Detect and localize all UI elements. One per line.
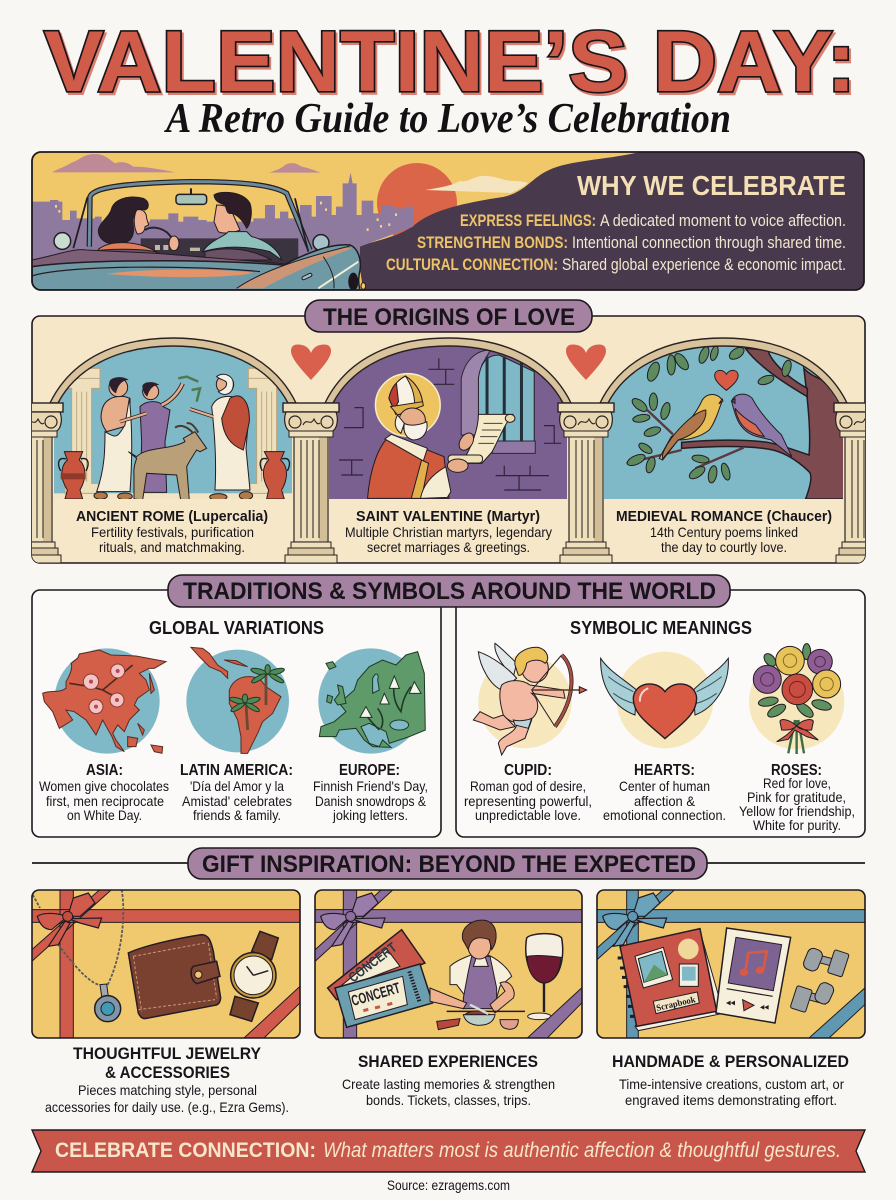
origin text: medieval romance: 14th Century poems linked [650,524,798,540]
arch: medieval romance scene [600,335,850,505]
card text: Pieces matching style, personal [78,1082,257,1098]
text: roses: Pink for gratitude, [747,789,846,805]
card text: Time-intensive creations, custom art, or [619,1076,844,1092]
text: asia: on White Day. [67,807,142,823]
text: europe: Finnish Friend's Day, [313,778,428,794]
card text: HANDMADE & PERSONALIZED [612,1052,849,1071]
card: jewelry and accessories [30,888,300,1115]
icon: heart left [291,345,331,380]
icon: heart right [566,345,606,380]
text: latin america [180,762,293,823]
card frame [315,890,582,1038]
reason: cultural connection: Shared global experience & economic impact. [562,256,846,274]
icon: cupid [473,643,587,755]
text: hearts [603,762,726,823]
card text: accessories for daily use. (e.g., Ezra Gems). [45,1099,289,1115]
map: europe with snowdrops [318,648,425,754]
reason: express feelings: A dedicated moment to voice affection. [600,212,846,230]
card: handmade and personalized [593,888,867,1108]
subtitle: A Retro Guide to Love’s Celebration [163,96,731,142]
card text [612,1052,849,1108]
panel: symbolic meanings [456,590,865,837]
text: cupid: unpredictable love. [475,807,581,823]
origin text: saint valentine: secret marriages & greetings. [367,539,530,555]
banner: celebrate connection [32,1130,865,1172]
text: roses: Yellow for friendship, [739,803,855,819]
illustration: tickets chef wine [313,888,597,1040]
banner: celebrate connection: CELEBRATE CONNECTION: [55,1139,316,1162]
card frame [32,890,300,1038]
text: europe: Danish snowdrops & [315,793,427,809]
text: cupid: CUPID: [504,762,552,779]
text: roses [739,762,855,833]
card: shared experiences [313,888,597,1108]
banner: celebrate connection: What matters most is authentic affection & thoughtful gestures. [323,1139,841,1162]
card text: & ACCESSORIES [105,1063,230,1082]
text: hearts: Center of human [619,778,710,794]
origin text: ancient rome: rituals, and matchmaking. [99,539,245,555]
card text [45,1044,289,1115]
scrapbook label: Scrapbook [655,994,696,1013]
text: hearts: affection & [634,793,696,809]
text: latin america: 'Día del Amor y la [190,778,284,794]
origin text: medieval romance: MEDIEVAL ROMANCE (Chaucer) [616,509,832,525]
origin text: medieval romance [616,509,832,555]
heading pill: the origins of love: THE ORIGINS OF LOVE [323,304,575,331]
card text: THOUGHTFUL JEWELRY [73,1044,262,1063]
text: roses: White for purity. [753,817,841,833]
text: hearts: HEARTS: [634,762,695,779]
origin text: ancient rome: Fertility festivals, purification [91,524,254,540]
subheading: global variations: GLOBAL VARIATIONS [149,618,324,638]
illustration: scrapbook player cufflinks [593,888,867,1040]
text: asia: first, men reciprocate [46,793,164,809]
origin text: saint valentine: Multiple Christian martyrs, legendary [345,524,552,540]
text: europe: EUROPE: [339,762,400,779]
reason: cultural connection [386,256,846,274]
origin text: ancient rome: ANCIENT ROME (Lupercalia) [76,509,268,525]
illustration: necklace wallet watch [30,888,300,1040]
columns [7,403,890,563]
red ticket label: CONCERT [345,939,400,985]
panel: global variations [32,590,441,837]
hero heading: WHY WE CELEBRATE [577,170,846,201]
reason: strengthen bonds: STRENGTHEN BONDS: [417,234,568,252]
text: asia [39,762,169,823]
icon: rose bouquet [749,644,844,754]
text: europe [313,762,428,823]
title: VALENTINE’S DAY: [46,16,858,112]
text: latin america: Amistad' celebrates [182,793,292,809]
panel: why we celebrate [32,152,864,291]
map: asia with blossoms [43,648,166,754]
text: europe: joking letters. [332,807,408,823]
reason: strengthen bonds: Intentional connection through shared time. [572,234,846,252]
text: latin america: LATIN AMERICA: [180,762,293,779]
text: cupid: representing powerful, [464,793,592,809]
reason: express feelings: EXPRESS FEELINGS: [460,212,596,230]
blue ticket label: CONCERT [349,980,402,1010]
hero frame [32,152,864,290]
text: asia: Women give chocolates [39,778,169,794]
reason: cultural connection: CULTURAL CONNECTION: [386,256,558,274]
text: asia: ASIA: [86,762,123,779]
text: cupid [464,762,592,823]
card frame [597,890,865,1038]
text: roses: ROSES: [771,762,822,779]
reason: strengthen bonds [417,234,846,252]
text: hearts: emotional connection. [603,807,726,823]
card text [342,1052,555,1108]
origin text: ancient rome [76,509,268,555]
card text: SHARED EXPERIENCES [358,1052,538,1071]
text: roses: Red for love, [763,775,831,791]
icon: winged heart [601,652,728,748]
origin text: medieval romance: the day to courtly love. [661,539,787,555]
card text: Create lasting memories & strengthen [342,1076,555,1092]
heading pill: gift inspiration: GIFT INSPIRATION: BEYOND THE EXPECTED [202,851,696,878]
text: latin america: friends & family. [193,807,281,823]
reason: express feelings [460,212,846,230]
origin text: saint valentine [345,509,552,555]
hero illustration: couple in convertible at sunset [32,152,864,291]
origin text: saint valentine: SAINT VALENTINE (Martyr) [356,509,540,525]
arch: saint valentine scene [325,335,575,505]
map: latin america with palms [186,647,289,753]
text: cupid: Roman god of desire, [470,778,586,794]
subheading: symbolic meanings: SYMBOLIC MEANINGS [570,618,752,638]
card text: engraved items demonstrating effort. [625,1092,837,1108]
arch: ancient rome scene [50,337,296,499]
heading pill: traditions and symbols: TRADITIONS & SYMBOLS AROUND THE WORLD [183,578,716,605]
panel: the origins of love [7,300,890,563]
title: VALENTINE’S DAY: [44,14,856,110]
card text: bonds. Tickets, classes, trips. [366,1092,531,1108]
source: Source: ezragems.com [387,1177,510,1193]
